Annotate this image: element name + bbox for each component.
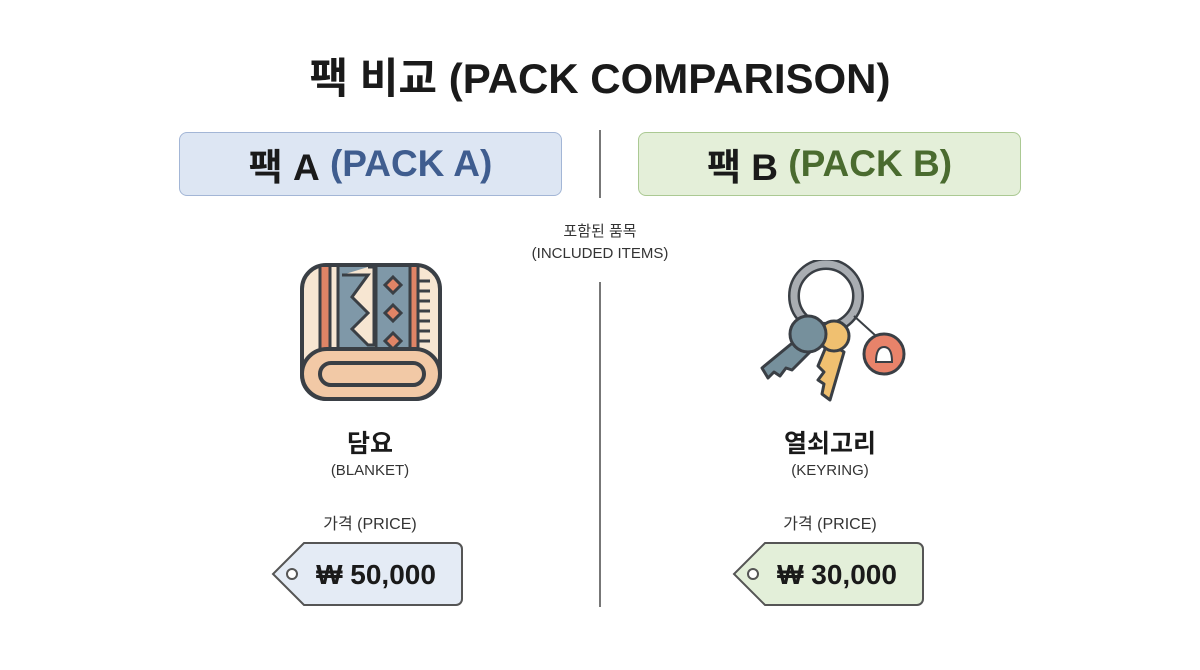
title: 팩 비교 (PACK COMPARISON) xyxy=(309,55,891,102)
header: pack B: 팩 B xyxy=(707,147,778,188)
header: pack A: 팩 A xyxy=(249,147,320,188)
item A label xyxy=(331,430,409,479)
item B label: 열쇠고리 xyxy=(784,430,876,458)
icon: blanket xyxy=(300,263,442,401)
included items label xyxy=(532,223,668,262)
price tag B xyxy=(732,542,924,606)
icon: keyring xyxy=(760,260,906,402)
header: pack B: (PACK B) xyxy=(788,143,952,184)
included items label: (INCLUDED ITEMS) xyxy=(532,245,668,262)
header: pack A xyxy=(179,132,562,196)
price label A: 가격 (PRICE) xyxy=(323,516,417,533)
item A label: (BLANKET) xyxy=(331,462,409,479)
price tag A: ₩ 50,000 xyxy=(316,559,436,590)
price tag B: ₩ 30,000 xyxy=(777,559,897,590)
header: pack A: (PACK A) xyxy=(330,143,492,184)
price label B: 가격 (PRICE) xyxy=(783,516,877,533)
item B label xyxy=(784,430,876,479)
item A label: 담요 xyxy=(347,430,393,458)
item B label: (KEYRING) xyxy=(791,462,869,479)
included items label: 포함된 품목 xyxy=(563,223,637,240)
header: pack B xyxy=(638,132,1021,196)
price tag A xyxy=(272,542,463,606)
